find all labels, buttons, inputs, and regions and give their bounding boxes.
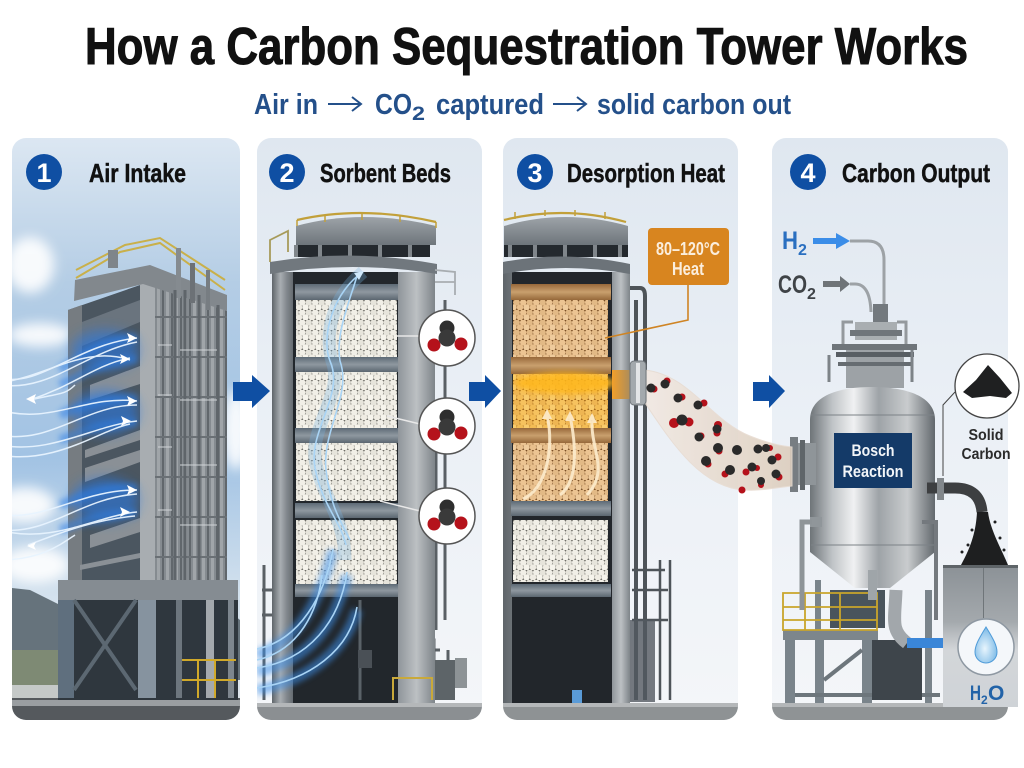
air flow stream bbox=[257, 271, 364, 690]
co2 label and arrow: CO bbox=[778, 271, 807, 299]
step badge 2: 2 bbox=[279, 158, 295, 188]
mountains bbox=[12, 588, 58, 650]
heading: sorbent beds: Sorbent Beds bbox=[320, 158, 451, 188]
subtitle: process summary: captured bbox=[436, 89, 544, 121]
collection bin bbox=[943, 565, 1018, 707]
tower 3 bbox=[503, 210, 630, 703]
bosch reaction label: Reaction bbox=[842, 462, 904, 481]
step badge 4: 4 bbox=[800, 158, 816, 188]
tower 1 bbox=[58, 238, 238, 700]
heading: air intake: Air Intake bbox=[89, 158, 186, 188]
h2 label and arrow bbox=[782, 227, 850, 259]
panel 4: carbon output bbox=[772, 138, 1008, 720]
solid carbon callout leader bbox=[943, 392, 955, 476]
reactor vessel bbox=[790, 304, 936, 620]
step badge 2 bbox=[269, 154, 305, 190]
ground bbox=[257, 706, 482, 720]
falling carbon bbox=[960, 512, 1008, 565]
co2 label and arrow bbox=[778, 271, 850, 303]
heading: desorption heat: Desorption Heat bbox=[567, 158, 725, 188]
flow arrow 3 to 4 bbox=[753, 375, 785, 408]
heat callout leader bbox=[605, 285, 688, 338]
heat callout: Heat bbox=[672, 259, 704, 279]
nozzle and flange bbox=[612, 361, 646, 405]
co2 molecule callout 1 bbox=[419, 310, 475, 366]
step badge 3: 3 bbox=[527, 158, 543, 188]
heading: carbon output: Carbon Output bbox=[842, 158, 990, 188]
step badge 3 bbox=[517, 154, 553, 190]
panel 2 header bbox=[269, 154, 451, 190]
gas inlet pipes bbox=[850, 241, 884, 312]
flow arrow 1 to 2 bbox=[233, 375, 270, 408]
h2 label and arrow: 2 bbox=[798, 242, 807, 259]
carbon discharge pipe bbox=[927, 478, 982, 512]
side pipes bbox=[630, 288, 670, 700]
sorbent beds and bands bbox=[296, 299, 397, 357]
tank body bbox=[810, 387, 935, 588]
subtitle: process summary: CO bbox=[375, 89, 412, 121]
heat callout bbox=[648, 228, 729, 285]
beds and bands bbox=[513, 299, 608, 357]
flow arrow 2 to 3 bbox=[469, 375, 501, 408]
co2 molecule callout 2 bbox=[419, 398, 475, 454]
louvers bbox=[80, 300, 140, 570]
ground bbox=[503, 706, 738, 720]
subtitle: process summary bbox=[254, 89, 791, 125]
step badge 4 bbox=[790, 154, 826, 190]
bosch reaction label bbox=[834, 433, 912, 488]
ground bbox=[772, 706, 1008, 720]
support frame bbox=[783, 580, 940, 703]
step badge 1: 1 bbox=[36, 158, 52, 188]
co2 molecule callout 3 bbox=[419, 488, 475, 544]
water callout: H bbox=[970, 682, 981, 705]
connector lines bbox=[380, 336, 422, 511]
bosch reaction label: Bosch bbox=[852, 441, 894, 460]
panel 4 header bbox=[790, 154, 990, 190]
side nozzle bbox=[794, 443, 816, 485]
water pipe bbox=[895, 590, 953, 643]
solid carbon callout bbox=[955, 354, 1019, 463]
subtitle: process summary: 2 bbox=[412, 104, 425, 125]
base frame bbox=[58, 580, 238, 600]
solid carbon callout: Solid bbox=[968, 427, 1004, 444]
roof bbox=[503, 210, 630, 274]
panel 2: sorbent beds bbox=[257, 138, 482, 720]
clouds bbox=[0, 237, 250, 583]
water callout: O bbox=[988, 682, 1004, 705]
panel 3 header bbox=[517, 154, 725, 190]
side equipment bbox=[262, 300, 448, 700]
subtitle: process summary: Air in bbox=[254, 89, 318, 121]
panel 1: air intake bbox=[0, 138, 250, 720]
water callout: 2 bbox=[981, 693, 988, 707]
h2 label and arrow: H bbox=[782, 227, 798, 255]
roof bbox=[270, 213, 455, 295]
co2 transfer tube with molecules bbox=[612, 361, 792, 494]
solid carbon callout: Carbon bbox=[962, 446, 1010, 463]
air flow arrows bbox=[0, 330, 139, 560]
reactor head bbox=[829, 304, 917, 388]
panel 3: desorption heat bbox=[503, 138, 738, 720]
subtitle: process summary: solid carbon out bbox=[597, 89, 791, 121]
tower 2 bbox=[262, 213, 467, 703]
heat callout: 80–120°C bbox=[656, 239, 720, 259]
ground bbox=[12, 698, 240, 720]
panel 1 header bbox=[26, 154, 186, 190]
co2 label and arrow: 2 bbox=[807, 286, 816, 303]
step badge 1 bbox=[26, 154, 62, 190]
water callout bbox=[958, 619, 1014, 707]
heat arrows bbox=[523, 409, 598, 499]
heat glow bbox=[515, 372, 615, 394]
